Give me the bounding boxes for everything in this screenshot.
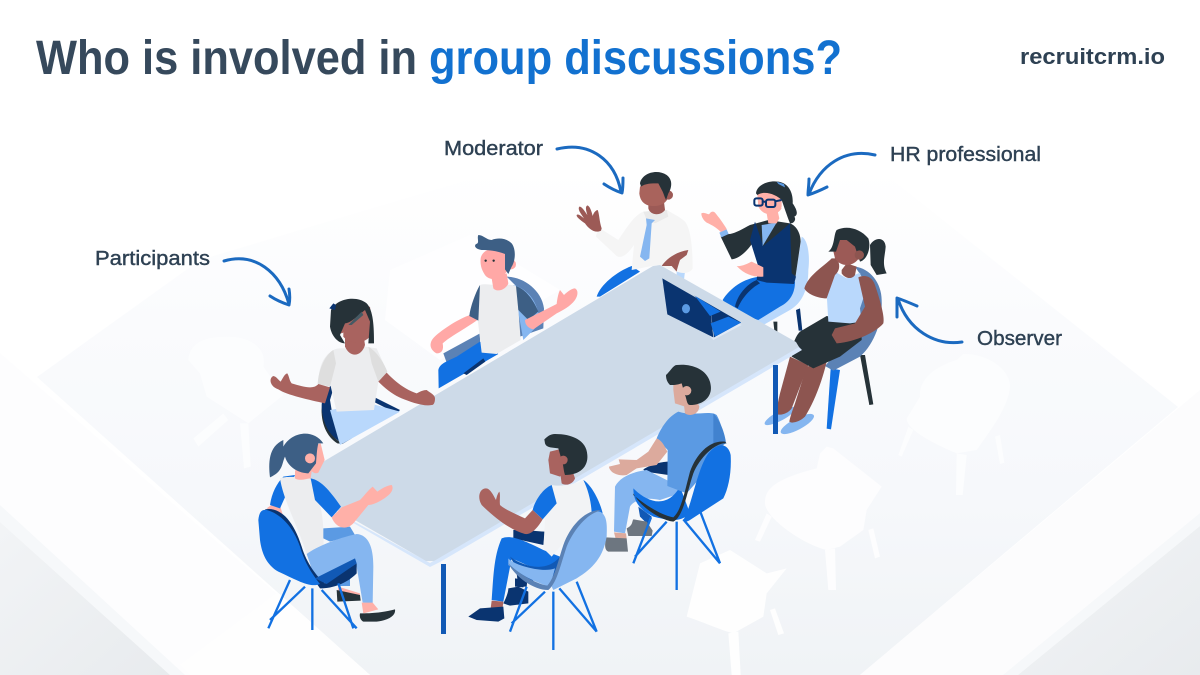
label: HR professional: HR professional	[890, 144, 1041, 166]
figure: front left, woman with ponytail	[258, 434, 395, 630]
label: participants: Participants	[95, 248, 210, 270]
figure: front right, man in blue t-shirt	[605, 365, 731, 590]
title	[36, 32, 842, 85]
arrow: participants	[224, 259, 290, 305]
figure: HR professional	[701, 181, 809, 333]
logo text: recruitcrm.io	[1020, 44, 1165, 69]
figure: participant top, boy with grey-blue sleeves	[431, 235, 577, 388]
faded chair: behind participants	[385, 235, 560, 360]
figure: moderator	[577, 172, 693, 297]
faded chair: right middle	[755, 447, 882, 590]
arrow: moderator	[557, 147, 623, 193]
title: group discussions?	[429, 32, 842, 85]
faded chair: left	[188, 337, 283, 468]
arrow: observer	[897, 298, 962, 343]
laptop	[662, 278, 742, 340]
figure: observer	[763, 228, 887, 438]
table	[289, 265, 802, 634]
label: observer: Observer	[977, 328, 1062, 350]
title: Who is involved in	[36, 32, 417, 85]
figure: participant left, woman with dark hair (chair and body)	[322, 380, 400, 445]
faded chair: bottom centre	[687, 550, 787, 675]
faded chair: right upper	[898, 354, 1010, 495]
figure: front centre, man in white shirt	[468, 434, 607, 650]
arrow: HR professional	[808, 153, 875, 195]
figure: participant left, woman with dark hair (upper body)	[271, 299, 435, 412]
label: moderator: Moderator	[444, 138, 543, 160]
